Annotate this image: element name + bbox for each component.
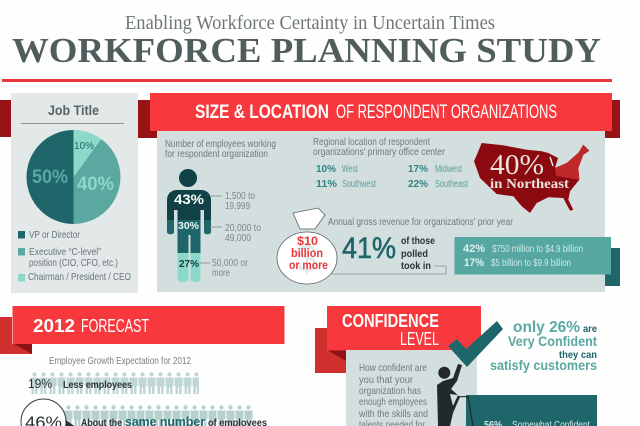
icon: segmented person chart: 30% xyxy=(178,221,199,232)
regional location list xyxy=(313,136,468,190)
icon: person on ladder xyxy=(437,364,473,426)
icon: money bag: $10 xyxy=(297,234,318,248)
revenue callout: 17% xyxy=(464,257,484,269)
icon: check mark xyxy=(448,321,503,367)
regional location list: organizations' primary office center xyxy=(313,146,445,158)
pie chart: 40% xyxy=(77,174,114,195)
very confident callout: only 26% xyxy=(513,319,580,336)
employee size labels: 20,000 to xyxy=(225,222,261,234)
forecast heading xyxy=(33,316,149,336)
revenue caption: Annual gross revenue for organizations' prior year xyxy=(328,216,513,228)
revenue callout: 42% xyxy=(463,243,485,255)
very confident callout: Very Confident xyxy=(508,333,597,349)
results box xyxy=(466,395,597,426)
pie legend xyxy=(18,229,131,283)
survey question: How confident are xyxy=(359,362,427,374)
revenue callout xyxy=(454,237,620,286)
regional location list: 10% xyxy=(316,163,337,175)
panel: 2012 forecast xyxy=(0,306,284,426)
pie chart xyxy=(26,130,120,224)
pie chart: 10% xyxy=(74,140,94,152)
section heading: SIZE & LOCATION xyxy=(195,102,329,123)
very confident callout: satisfy customers xyxy=(490,357,597,373)
regional location list: Southeast xyxy=(435,179,468,190)
pie legend: position (CIO, CFO, etc.) xyxy=(29,257,118,269)
people row: 46% same number xyxy=(21,399,267,426)
regional location list: 22% xyxy=(408,178,429,190)
people row: 19% less employees xyxy=(28,372,199,394)
forecast heading: FORECAST xyxy=(81,316,149,336)
survey question: enough employees xyxy=(359,396,427,408)
growth caption: Employee Growth Expectation for 2012 xyxy=(49,355,191,367)
icon: segmented person chart xyxy=(167,169,211,282)
regional location list: Regional location of respondent xyxy=(313,136,430,148)
employee size labels xyxy=(200,190,261,279)
survey question: organization has xyxy=(359,385,421,397)
icon: money bag xyxy=(277,208,337,284)
map: 40% in Northeast: 40% xyxy=(490,149,544,181)
employees caption xyxy=(165,138,276,160)
panel: job title xyxy=(0,93,138,293)
survey question: with the skills and xyxy=(358,408,428,420)
41% statistic xyxy=(330,232,446,274)
confidence heading xyxy=(342,311,439,349)
regional location list: West xyxy=(342,164,358,175)
pie legend: VP or Director xyxy=(29,229,80,241)
title: WORKFORCE PLANNING STUDY xyxy=(12,31,601,70)
survey question xyxy=(358,362,428,426)
regional location list: Southwest xyxy=(342,179,376,190)
41% statistic: of those xyxy=(401,235,435,247)
people row: 19% less employees: Less employees xyxy=(63,380,132,391)
confidence heading: LEVEL xyxy=(400,329,439,349)
employee size labels: 1,500 to xyxy=(225,190,255,202)
regional location list: 11% xyxy=(316,178,338,190)
revenue callout: $750 million to $4.9 billion xyxy=(492,244,583,255)
survey question: you that your xyxy=(359,374,413,386)
revenue callout: $5 billion to $9.9 billion xyxy=(491,258,571,269)
header rule xyxy=(2,79,612,82)
pie chart: 50% xyxy=(32,167,68,188)
very confident callout: are xyxy=(583,324,597,335)
pie legend: Chairman / President / CEO xyxy=(28,271,131,283)
subtitle: Enabling Workforce Certainty in Uncertain Times xyxy=(125,12,495,34)
forecast heading: 2012 xyxy=(33,316,75,336)
icon: money bag: billion xyxy=(291,246,323,260)
pie legend: Executive “C-level” xyxy=(29,246,101,258)
regional location list: Midwest xyxy=(435,164,462,175)
employees caption: for respondent organization xyxy=(165,148,268,160)
map: 40% in Northeast xyxy=(474,143,589,213)
employee size labels: more xyxy=(212,267,230,279)
job title heading: Job Title xyxy=(48,102,99,118)
people row: 19% less employees: 19% xyxy=(28,377,52,391)
41% statistic: took in xyxy=(401,260,431,272)
employees caption: Number of employees working xyxy=(165,138,276,150)
icon: money bag: or more xyxy=(289,258,328,272)
icon: money bag: $ xyxy=(297,237,317,281)
panel: confidence level xyxy=(315,306,597,426)
employee size labels: 50,000 or xyxy=(212,257,248,269)
very confident callout: they can xyxy=(559,350,597,361)
very confident callout xyxy=(490,319,597,373)
41% statistic: 41% xyxy=(342,232,396,265)
panel: size and location xyxy=(138,93,620,292)
confidence heading: CONFIDENCE xyxy=(342,311,439,331)
icon: segmented person chart: 27% xyxy=(179,259,199,270)
employee size labels: 19,999 xyxy=(225,200,250,212)
regional location list: 17% xyxy=(408,163,429,175)
employee size labels: 49,000 xyxy=(225,232,251,244)
41% statistic: polled xyxy=(401,248,428,260)
map: 40% in Northeast: in Northeast xyxy=(490,176,570,191)
icon: segmented person chart: 43% xyxy=(174,191,205,207)
section heading xyxy=(195,102,557,123)
